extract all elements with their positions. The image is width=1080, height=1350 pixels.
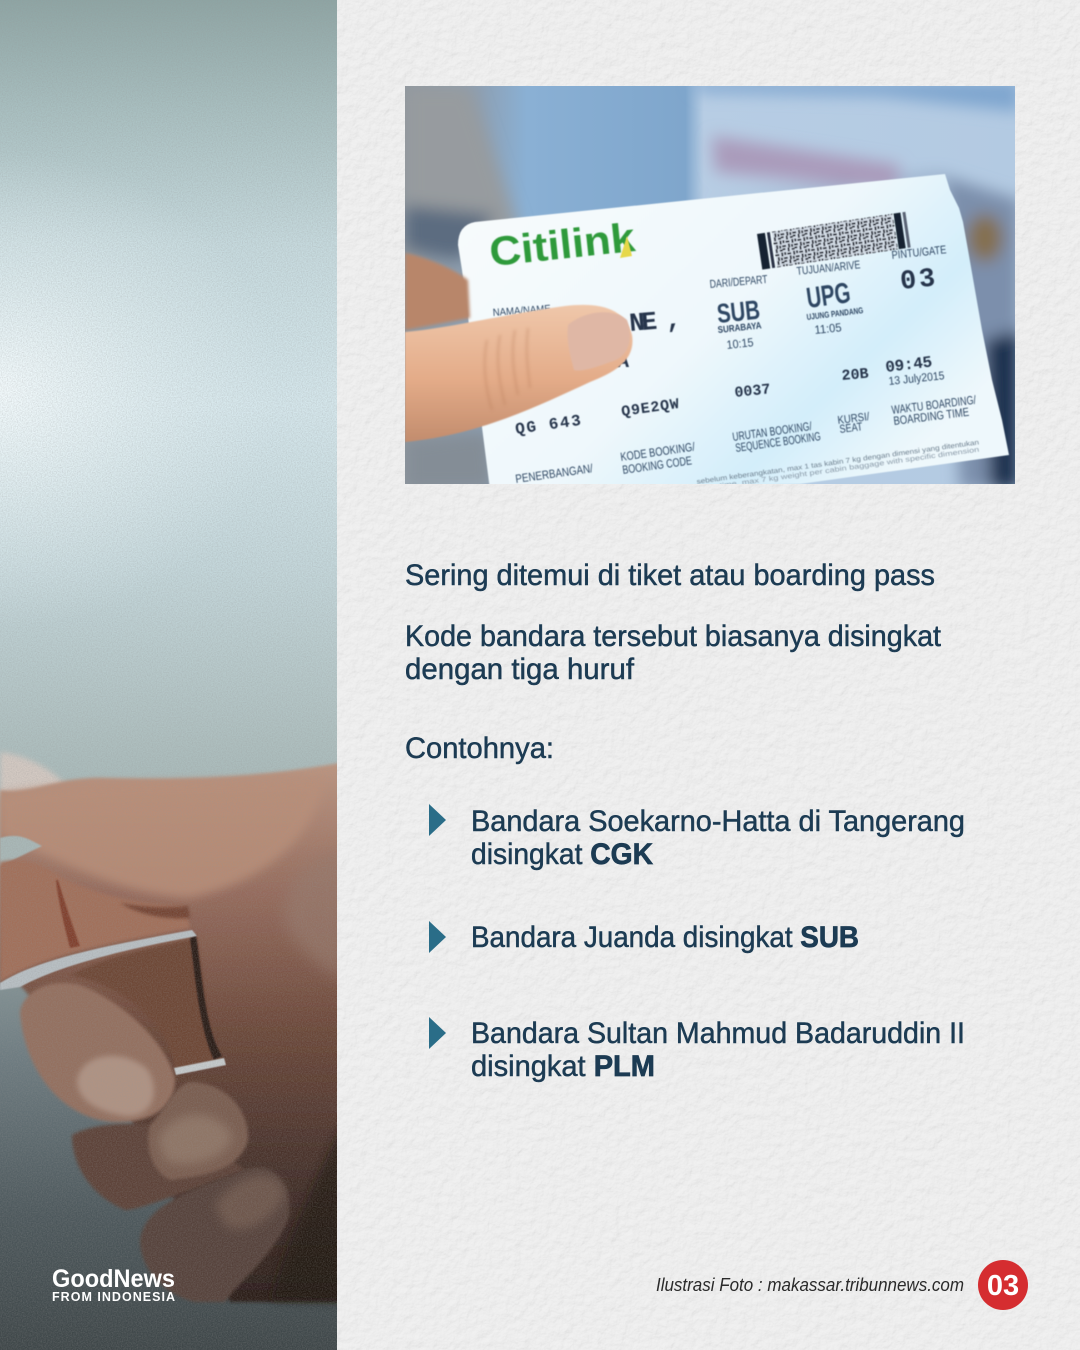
third finger tip — [140, 1168, 289, 1302]
icon: arrow bullet — [429, 1017, 446, 1049]
ticket text: 10:15 — [726, 335, 754, 352]
thumb nail — [77, 1056, 154, 1116]
dark crease — [190, 935, 222, 1060]
hand palm and index finger — [0, 762, 345, 1302]
list item: PLM: disingkat PLM — [471, 1050, 655, 1083]
ticket text: SEQUENCE BOOKING — [734, 429, 822, 455]
ticket text — [492, 244, 980, 490]
logo: GoodNews from Indonesia — [52, 1265, 175, 1304]
ticket text: Q9E2QW — [620, 396, 680, 421]
ticket text: PINTU/GATE — [891, 244, 947, 262]
thumb — [20, 983, 175, 1122]
citilink logo: Citilink — [487, 214, 637, 275]
lower dark fingers — [72, 1124, 245, 1210]
palm inner — [72, 938, 212, 1067]
ticket text: TUJUAN/ARIVE — [796, 259, 861, 278]
page number badge: 03 — [987, 1270, 1019, 1302]
ticket text: 0037 — [734, 381, 771, 402]
index finger highlight — [0, 778, 325, 898]
ticket text: SURABAYA — [717, 320, 762, 336]
ticket text: SEAT — [839, 421, 863, 436]
text: abbreviation note — [405, 620, 942, 686]
middle finger — [0, 860, 190, 982]
list item: CGK — [429, 804, 965, 871]
ticket text: KODE BOOKING/ — [619, 440, 696, 464]
logo: GoodNews from Indonesia: GoodNews — [52, 1265, 175, 1293]
finger crease — [120, 903, 190, 918]
ticket text: UPG — [805, 277, 853, 315]
ticket text: BOARDING TIME — [893, 405, 970, 428]
text: intro line: Sering ditemui di tiket atau boarding pass — [405, 559, 935, 592]
photo credit: Ilustrasi Foto : makassar.tribunnews.com — [656, 1275, 964, 1295]
ticket text: time, max 7 kg weight per cabin baggage with specific dimension — [719, 447, 980, 490]
palm shade — [272, 1129, 337, 1306]
ticket text: BOOKING CODE — [621, 453, 693, 477]
ticket text: QG 643 — [514, 412, 582, 439]
ticket text: 09:45 — [884, 353, 933, 377]
list item: CGK: disingkat CGK — [471, 838, 653, 871]
ticket text: 11:05 — [814, 320, 842, 337]
ticket text: NAMA/NAME — [492, 303, 551, 319]
ticket text: 13 July2015 — [888, 370, 945, 388]
ticket text: URUTAN BOOKING/ — [731, 419, 813, 444]
barcode — [757, 212, 911, 270]
gap behind fingers — [0, 836, 42, 866]
thumb wrinkles — [485, 328, 530, 410]
ticket text: 03 — [899, 264, 937, 298]
thumb in photo — [405, 305, 632, 442]
photo: boarding pass — [405, 80, 1020, 490]
list item: SUB: Bandara Juanda disingkat SUB — [471, 921, 859, 954]
ring mark — [56, 880, 80, 948]
ticket text: A — [617, 351, 629, 374]
second finger tip — [148, 1082, 248, 1180]
list item: PLM — [429, 1017, 965, 1083]
ticket sliver upper — [0, 930, 197, 990]
ticket text: 20B — [841, 366, 869, 385]
icon: arrow bullet — [429, 921, 446, 953]
page number badge — [978, 1260, 1028, 1310]
ticket text: DARI/DEPART — [709, 274, 768, 291]
ticket text: NE , — [628, 305, 682, 339]
thumb nail — [567, 312, 630, 371]
icon: arrow bullet — [429, 804, 446, 836]
text: abbreviation note: dengan tiga huruf — [405, 653, 635, 686]
right palm highlight — [286, 886, 337, 976]
ticket sliver lower — [174, 1058, 226, 1075]
ticket text: SUB — [715, 295, 761, 329]
panel: paper background — [337, 0, 1080, 1350]
ticket text: PENERBANGAN/ — [514, 461, 594, 486]
ticket text: WAKTU BOARDING/ — [891, 393, 977, 417]
list item: PLM: Bandara Sultan Mahmud Badaruddin II — [471, 1017, 965, 1050]
back fingers — [405, 253, 470, 330]
ticket — [405, 174, 1009, 490]
ticket text: KURSI/ — [837, 411, 871, 427]
text: examples heading: Contohnya: — [405, 732, 554, 765]
list item: CGK: Bandara Soekarno-Hatta di Tangerang — [471, 805, 965, 838]
ticket text: UJUNG PANDANG — [806, 305, 864, 322]
ticket text: sebelum keberangkatan, max 1 tas kabin 7 kg dengan dimensi yang ditentukan — [696, 439, 980, 486]
panel: left hand photo — [0, 0, 345, 1350]
logo: GoodNews from Indonesia: FROM INDONESIA — [52, 1290, 175, 1304]
text: abbreviation note: Kode bandara tersebut biasanya disingkat — [405, 620, 942, 653]
fingernail at top left — [0, 750, 63, 792]
